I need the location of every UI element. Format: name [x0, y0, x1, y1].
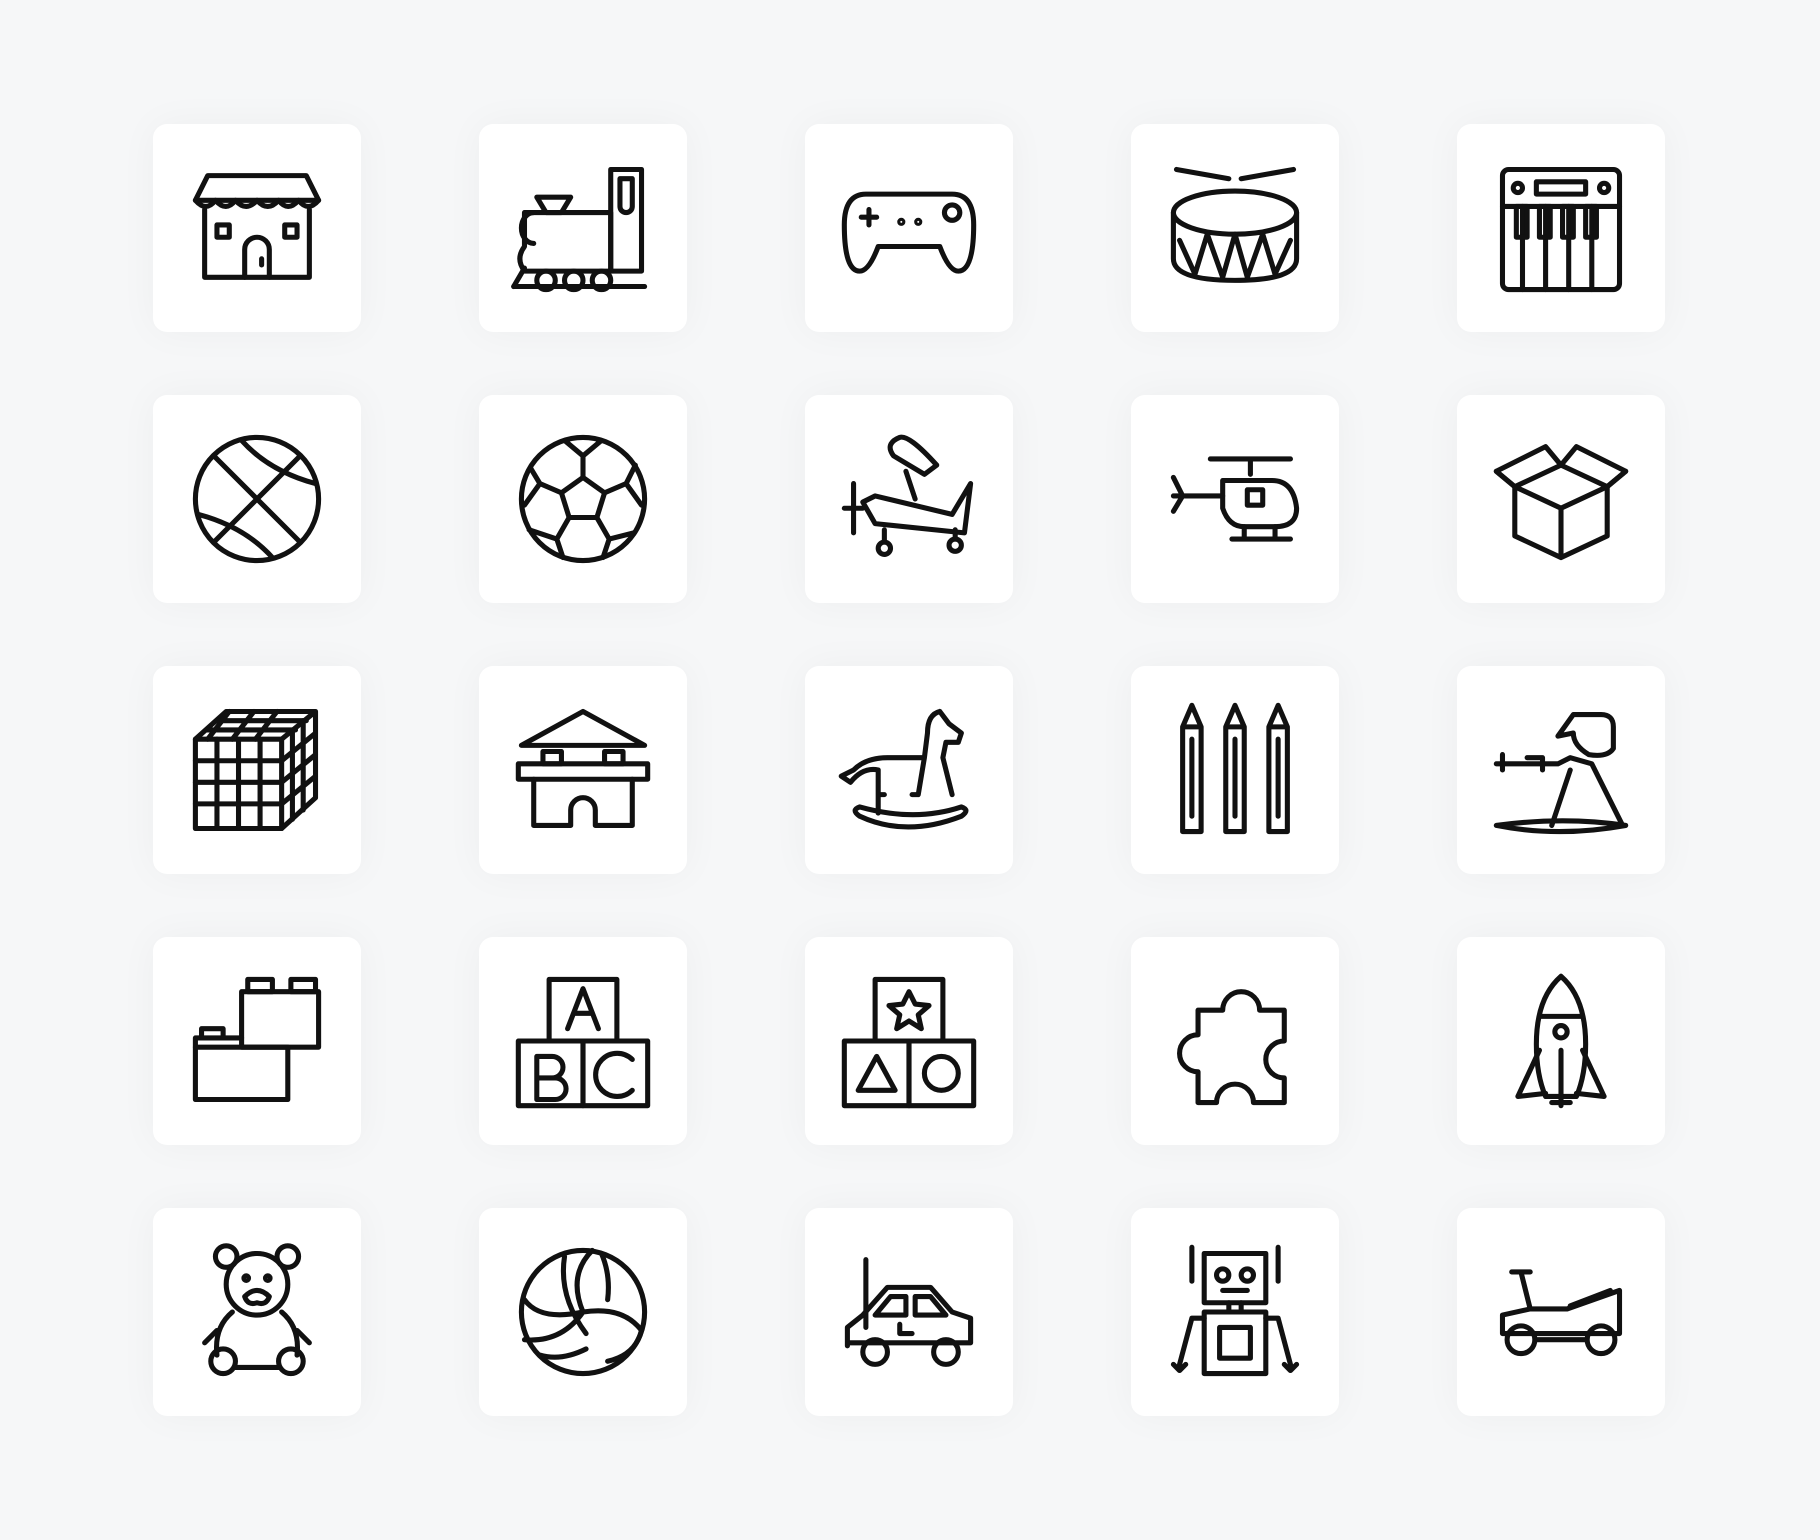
icon: soccer ball	[479, 395, 687, 603]
icon: game controller	[805, 124, 1013, 332]
icon: train	[479, 124, 687, 332]
icon: robot	[1131, 1208, 1339, 1416]
icon: building blocks	[479, 666, 687, 874]
icon: toy soldier	[1457, 666, 1665, 874]
icon: keyboard	[1457, 124, 1665, 332]
icon: toy plane	[805, 395, 1013, 603]
icon: teddy bear	[153, 1208, 361, 1416]
icon: basketball	[153, 395, 361, 603]
icon: lego bricks	[153, 937, 361, 1145]
icon: rocket	[1457, 937, 1665, 1145]
icon: crayons	[1131, 666, 1339, 874]
icon: helicopter	[1131, 395, 1339, 603]
icon: toy shop	[153, 124, 361, 332]
icon: drum	[1131, 124, 1339, 332]
icon: volleyball	[479, 1208, 687, 1416]
icon: ABC blocks	[479, 937, 687, 1145]
icon: rocking horse	[805, 666, 1013, 874]
icon: ride-on car	[1457, 1208, 1665, 1416]
icon: toy car	[805, 1208, 1013, 1416]
icon: shape blocks	[805, 937, 1013, 1145]
icon: rubik cube	[153, 666, 361, 874]
icon: puzzle piece	[1131, 937, 1339, 1145]
icon: box	[1457, 395, 1665, 603]
